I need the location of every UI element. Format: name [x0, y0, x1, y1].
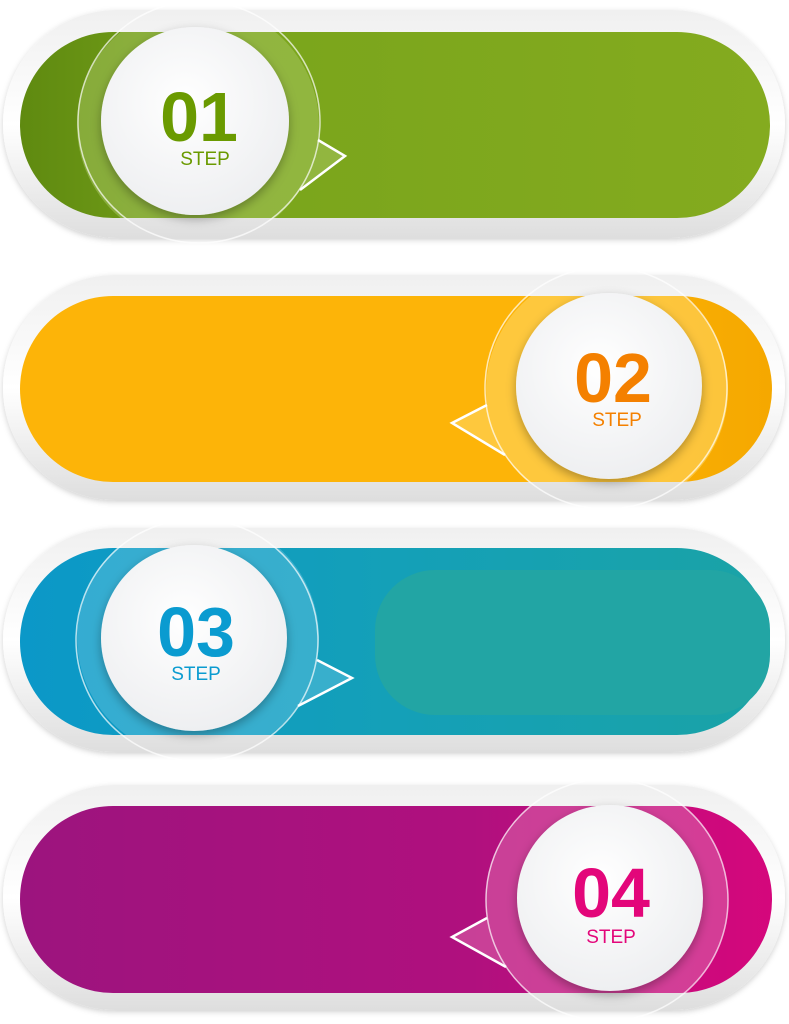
white disc — [516, 293, 702, 479]
ring with speech tail — [77, 1, 345, 246]
step number: 04 — [572, 854, 650, 932]
ring with speech tail — [76, 517, 352, 761]
panel: step 04 — [3, 779, 785, 1021]
ring with speech tail — [452, 267, 728, 511]
panel: step 04: STEP — [586, 927, 636, 948]
white disc — [517, 805, 703, 991]
panel: step 02 — [3, 267, 785, 511]
inner highlight box — [375, 570, 770, 715]
white disc — [101, 27, 289, 215]
panel: step 01 — [3, 1, 785, 246]
panel: step 03 — [3, 517, 785, 761]
panel: step 03: STEP — [171, 664, 221, 685]
step number: 02 — [574, 339, 652, 417]
white disc — [101, 545, 287, 731]
step number: 01 — [160, 78, 238, 156]
panel: step 02: STEP — [592, 410, 642, 431]
panel: step 01: STEP — [180, 149, 230, 170]
ring with speech tail — [452, 779, 728, 1021]
step number: 03 — [157, 593, 235, 671]
